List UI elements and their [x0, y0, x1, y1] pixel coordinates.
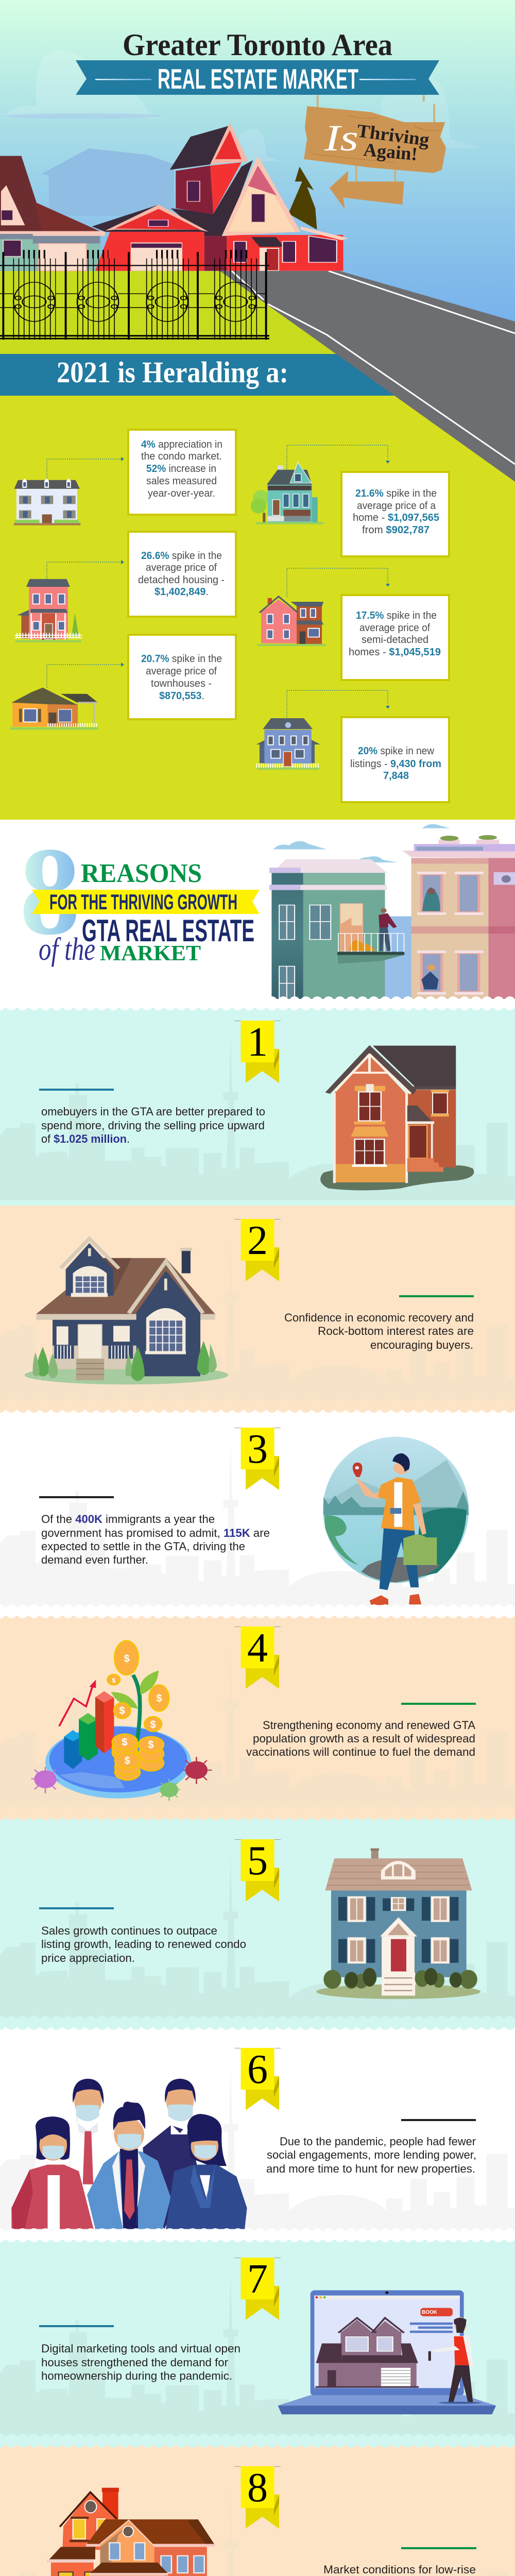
stat card: townhouses: $870,553. — [159, 690, 204, 702]
ribbon number 1: 1 — [247, 1020, 268, 1065]
skyline — [0, 1035, 515, 1200]
text: reason 2: encouraging buyers. — [370, 1338, 473, 1351]
heading: 8 reasons — [20, 821, 260, 967]
stat card: semi-detached: 17.5% spike in the — [356, 610, 437, 621]
stat card: average home: average price of a — [357, 500, 436, 512]
skyline — [0, 1644, 515, 1810]
stat card: detached housing: 26.6% spike in the — [141, 550, 222, 562]
panel: hero — [0, 28, 515, 482]
iron fence — [0, 252, 269, 340]
panel: reason 6 — [0, 2047, 515, 2240]
stat card: condo market: year-over-year. — [148, 488, 215, 499]
skyline — [0, 2066, 515, 2232]
icon: pink house — [15, 579, 82, 642]
text: reason 6: Due to the pandemic, people had fewer — [280, 2135, 476, 2148]
stat card: average home: from $902,787 — [362, 524, 430, 536]
ribbon number 3: 3 — [247, 1427, 268, 1472]
text: reason 6 — [266, 2135, 476, 2175]
grass lawn — [0, 271, 337, 354]
ribbon number 4: 4 — [247, 1625, 268, 1671]
stat card: detached housing — [128, 532, 236, 617]
skyline — [0, 1854, 515, 2020]
scalloped edge — [0, 2231, 515, 2240]
stat card: condo market — [128, 430, 236, 515]
stat card: townhouses: townhouses - — [151, 678, 212, 689]
scalloped edge — [0, 999, 515, 1008]
text: reason 4: Strengthening economy and renewed GTA — [263, 1719, 475, 1732]
banner: real estate market — [76, 60, 439, 95]
text: reason 3: demand even further. — [41, 1553, 148, 1566]
ribbon number 6: 6 — [247, 2047, 268, 2092]
text: reason 4: vaccinations will continue to fuel the demand — [246, 1745, 475, 1758]
panel: 8 reasons heading — [20, 821, 515, 1001]
stat card: average home: home - $1,097,565 — [353, 512, 439, 523]
illustration: growth chart and coins: $ — [150, 1719, 156, 1731]
skyline — [0, 2484, 515, 2576]
illustration: growth chart and coins: $ — [148, 1739, 154, 1751]
skyline — [0, 2272, 515, 2437]
heading: 8 reasons: FOR THE THRIVING GROWTH — [49, 890, 237, 914]
heading: 8 reasons: MARKET — [100, 942, 201, 965]
text: reason 5 — [41, 1924, 246, 1964]
divider bar — [401, 1703, 476, 1705]
ribbon number 4 — [234, 1625, 281, 1689]
heading: 8 reasons: of the — [39, 932, 95, 967]
ribbon number 8: 8 — [247, 2465, 268, 2511]
ribbon number 6 — [234, 2047, 281, 2110]
ribbon number 7: 7 — [247, 2257, 268, 2302]
text: reason 1 — [41, 1105, 265, 1145]
icon: teal house — [251, 462, 323, 524]
stat card: detached housing: average price of — [146, 562, 217, 573]
stat card: new listings: 20% spike in new — [358, 745, 435, 757]
wooden sign: is thriving again: Thriving — [356, 120, 431, 150]
icon: orange house — [10, 688, 98, 730]
illustration: apartment buildings — [269, 824, 515, 1001]
connector arrows — [47, 445, 388, 717]
illustration: blue colonial house — [316, 1849, 480, 1999]
stat card: semi-detached — [341, 595, 449, 680]
text: reason 7 — [41, 2342, 241, 2382]
panel: 2021 statistics — [10, 430, 449, 802]
illustration: laptop house tour — [278, 2290, 496, 2414]
text: reason 8: Market conditions for low-rise — [323, 2563, 476, 2576]
banner: real estate market: REAL ESTATE MARKET — [158, 63, 358, 95]
stat card: semi-detached: semi-detached — [362, 634, 428, 646]
text: reason 5: Sales growth continues to outpace — [41, 1924, 217, 1937]
stat card: condo market: sales measured — [146, 476, 217, 487]
stat card: semi-detached: homes - $1,045,519 — [349, 647, 441, 658]
panel: reason 8 — [0, 2465, 515, 2576]
wooden sign: is thriving again — [304, 95, 446, 209]
divider bar — [39, 1496, 114, 1498]
illustration: growth chart and coins: $ — [119, 1705, 125, 1717]
text: reason 5: listing growth, leading to renewed condo — [41, 1938, 246, 1951]
divider bar — [399, 1295, 474, 1297]
stat card: condo market: 52% increase in — [146, 463, 216, 474]
illustration: growth chart and coins: $ — [156, 1693, 162, 1704]
ribbon number 5 — [234, 1838, 281, 1902]
panel: reason 2 — [0, 1218, 515, 1410]
illustration: orange two-storey house — [23, 2488, 246, 2576]
panel: reason 1 — [0, 999, 515, 1200]
text: reason 6: social engagements, more lending power, — [267, 2148, 476, 2161]
text: reason 1: of $1.025 million. — [41, 1132, 130, 1145]
stat card: condo market: the condo market. — [141, 451, 222, 462]
text: reason 3: expected to settle in the GTA, driving the — [41, 1540, 245, 1553]
divider bar — [401, 2119, 476, 2121]
text: reason 1: omebuyers in the GTA are better prepared to — [41, 1105, 265, 1118]
ribbon number 1 — [234, 1020, 281, 1083]
text: reason 5: price appreciation. — [41, 1952, 135, 1964]
icon: white house — [14, 479, 80, 526]
stat card: average home: 21.6% spike in the — [355, 488, 437, 499]
illustration: orange house — [320, 1045, 474, 1190]
ribbon number 8 — [234, 2465, 281, 2529]
illustration: left brown house — [0, 156, 105, 271]
wooden sign: is thriving again: Is — [324, 117, 358, 159]
text: reason 2: Confidence in economic recovery and — [284, 1311, 474, 1324]
scalloped edge — [0, 2019, 515, 2027]
scalloped edge — [0, 1607, 515, 1616]
text: reason 6: and more time to hunt for new properties. — [266, 2162, 475, 2175]
scalloped edge — [0, 1401, 515, 1410]
illustration: masked people — [11, 2079, 247, 2229]
heading: 8 reasons: 8 — [20, 821, 80, 961]
illustration: traveller with map pin — [323, 1437, 469, 1605]
heading band — [0, 354, 402, 396]
scalloped edge — [0, 1809, 515, 1818]
wooden sign: is thriving again: Again! — [363, 139, 418, 164]
illustration: growth chart and coins — [31, 1641, 212, 1801]
illustration: growth chart and coins: $ — [124, 1653, 130, 1665]
illustration: laptop house tour: BOOK — [422, 2310, 438, 2315]
text: reason 7: homeownership during the pandemic. — [41, 2369, 232, 2382]
title: Greater Toronto Area — [123, 28, 392, 62]
text: reason 2: Rock-bottom interest rates are — [318, 1325, 474, 1337]
arrow heads — [121, 457, 390, 709]
text: reason 3: government has promised to admit, 115K are — [41, 1527, 270, 1539]
ribbon number 2 — [234, 1218, 281, 1281]
divider bar — [39, 1907, 114, 1909]
illustration: growth chart and coins: $ — [122, 1737, 128, 1748]
text: reason 4: population growth as a result of widespread — [253, 1732, 475, 1745]
stat card: condo market: 4% appreciation in — [141, 439, 222, 450]
stat card: new listings: listings - 9,430 from — [350, 758, 441, 770]
text: reason 1: spend more, driving the selling price upward — [41, 1119, 265, 1132]
text: reason 3: Of the 400K immigrants a year the — [41, 1513, 215, 1526]
panel: reason 3 — [0, 1427, 515, 1616]
text: reason 7: Digital marketing tools and virtual open — [41, 2342, 241, 2355]
heading: 8 reasons: GTA REAL ESTATE — [82, 913, 254, 948]
panel: reason 5 — [0, 1838, 515, 2027]
scalloped edge — [0, 2436, 515, 2445]
icon: blue house — [256, 718, 320, 770]
ribbon number 7 — [234, 2257, 281, 2320]
ribbon number 2: 2 — [247, 1218, 268, 1263]
text: reason 4 — [246, 1719, 475, 1758]
background clouds and silhouette — [3, 50, 483, 216]
stat card: detached housing: detached housing - — [138, 574, 225, 586]
text: reason 7: houses strengthened the demand for — [41, 2356, 228, 2369]
panel: reason 7 — [0, 2257, 515, 2445]
illustration: navy house — [25, 1239, 228, 1384]
text: reason 2 — [284, 1311, 474, 1351]
road — [220, 271, 515, 482]
divider bar — [39, 2325, 114, 2327]
divider bar — [39, 1089, 114, 1091]
stat card: townhouses: 20.7% spike in the — [141, 653, 222, 665]
illustration: growth chart and coins: $ — [124, 1755, 130, 1767]
ribbon number 3 — [234, 1427, 281, 1490]
stat card: townhouses — [128, 635, 236, 719]
divider bar — [401, 2547, 476, 2549]
illustration: growth chart and coins: $ — [112, 1677, 116, 1684]
stat card: average home — [341, 472, 449, 556]
stat card: townhouses: average price of — [146, 666, 217, 677]
stat card: semi-detached: average price of — [359, 622, 430, 634]
text: reason 3 — [41, 1513, 270, 1566]
illustration: red house — [92, 123, 348, 271]
stat card: new listings: 7,848 — [383, 770, 409, 782]
panel: reason 4 — [0, 1625, 515, 1818]
stat card: detached housing: $1,402,849. — [154, 586, 209, 598]
skyline — [0, 1442, 515, 1608]
heading: 8 reasons: REASONS — [81, 859, 202, 888]
icon: brick house — [257, 597, 326, 646]
ribbon number 5: 5 — [247, 1838, 268, 1884]
stat card: new listings — [341, 717, 449, 802]
heading band: 2021 is Heralding a: — [57, 355, 288, 389]
skyline — [0, 1236, 515, 1402]
